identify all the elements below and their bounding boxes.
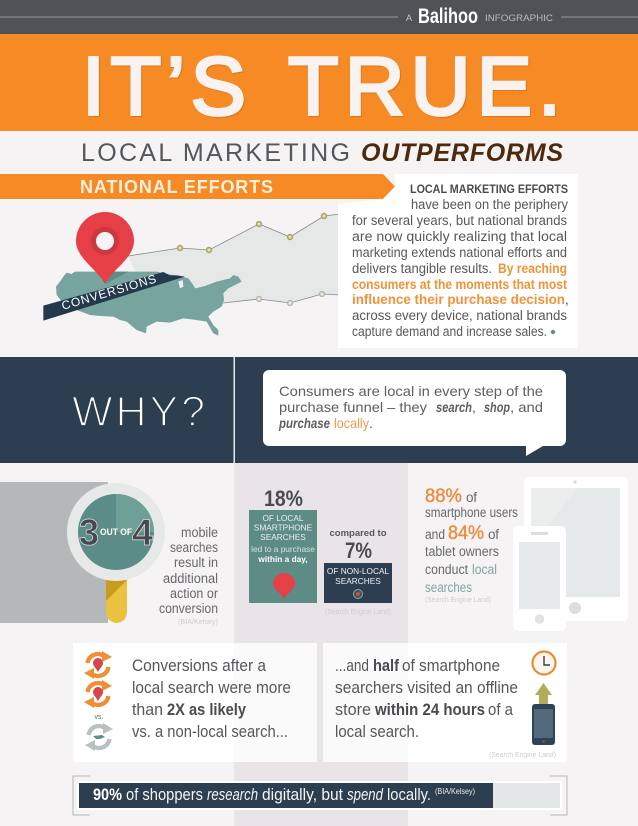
panel: half of smartphone searchers: of smartphone	[402, 657, 500, 675]
subtitle: local marketing outperforms	[81, 139, 563, 167]
stat card: 18% of local smartphone searches: led to a purchase	[251, 544, 315, 554]
magnifier stat: 3 out of 4: OUT OF	[100, 527, 132, 537]
magnifier stat: 3 out of 4: 3	[79, 512, 99, 553]
title banner: IT'S TRUE.: IT’S	[83, 40, 247, 134]
text: 88% of smartphone users and 84% of tablet owners: (Search Engine Land)	[425, 595, 491, 604]
text: 88% of smartphone users and 84% of tablet owners: of	[488, 527, 499, 542]
icon: upward arrow	[535, 683, 552, 704]
icon: tablet	[524, 477, 628, 621]
stat card: 18% of local smartphone searches: SEARCHES	[260, 532, 306, 542]
speech bubble: consumers are local: , and	[510, 399, 543, 415]
speech bubble: consumers are local: search	[436, 399, 472, 415]
magnifier stat: 3 out of 4	[0, 482, 165, 623]
text: mobile searches result: mobile	[181, 525, 218, 540]
bottom progress bar: 90% of shoppers: 90%	[93, 786, 122, 804]
bottom progress bar: 90% of shoppers: spend	[347, 786, 384, 804]
text: mobile searches result	[159, 525, 218, 626]
speech bubble: consumers are local: ,	[472, 399, 476, 415]
stat card: 7% of non-local searches: (Search Engine Land)	[325, 607, 391, 616]
panel: conversions after a local search: local search were more	[132, 679, 291, 697]
speech bubble: consumers are local: purchase funnel – they	[279, 399, 427, 415]
text: 88% of smartphone users and 84% of tablet owners: 84%	[448, 523, 484, 544]
panel: local marketing efforts text: capture demand and increase sales.	[352, 324, 547, 339]
text: mobile searches result: action or	[170, 586, 218, 601]
panel: half of smartphone searchers: ...and	[335, 657, 369, 675]
text: mobile searches result: searches	[170, 540, 218, 555]
panel: local marketing efforts text: consumers at the moments that most	[352, 277, 567, 292]
bottom progress bar: 90% of shoppers: of shoppers	[126, 786, 203, 804]
speech bubble: consumers are local	[263, 370, 566, 456]
why band	[0, 357, 638, 463]
why band: WHY?	[72, 388, 205, 436]
national efforts arrow banner	[0, 174, 395, 199]
stat card: 7% of non-local searches: OF NON-LOCAL	[327, 566, 389, 576]
bottom progress bar: 90% of shoppers: digitally, but	[262, 786, 343, 804]
panel: half of smartphone searchers: local search.	[335, 723, 419, 741]
panel: half of smartphone searchers: within 24 hours	[374, 701, 485, 719]
panel: half of smartphone searchers: searchers visited an offline	[335, 679, 518, 697]
panel: conversions after a local search: than	[132, 701, 163, 719]
speech bubble: consumers are local: .	[369, 415, 373, 431]
stat card: 7% of non-local searches	[324, 528, 392, 616]
panel: local marketing efforts text: marketing extends national efforts and	[352, 245, 567, 260]
icon: phone	[532, 704, 555, 745]
panel: conversions after a local search: vs. a non-local search...	[132, 723, 288, 741]
panel: half of smartphone searchers: of a	[488, 701, 514, 719]
panel: local marketing efforts text: have been on the periphery	[411, 197, 568, 212]
header bar: A Balihoo infographic: A	[406, 13, 412, 23]
speech bubble: consumers are local: shop	[484, 399, 510, 415]
label: vs.: vs.	[95, 714, 104, 721]
panel: conversions after a local search	[73, 643, 317, 762]
speech bubble: consumers are local: Consumers are local in every step of the	[279, 383, 543, 399]
panel: local marketing efforts text: for several years, but national brands	[352, 213, 567, 228]
icon: smartphone	[513, 526, 566, 631]
subtitle: local marketing outperforms: LOCAL MARKETING	[81, 139, 350, 167]
title banner: IT'S TRUE.: TRUE.	[289, 40, 562, 134]
panel: local marketing efforts text: across every device, national brands	[352, 308, 567, 323]
text: 88% of smartphone users and 84% of tablet owners	[425, 486, 518, 604]
icon: grey conversion cycle	[85, 723, 113, 751]
panel: local marketing efforts text: ,	[565, 292, 569, 307]
icon: orange conversion cycle 1	[84, 651, 112, 679]
stat card: 18% of local smartphone searches: within a day,	[257, 554, 308, 564]
icon: clock	[532, 652, 556, 674]
panel: half of smartphone searchers: store	[335, 701, 371, 719]
panel: conversions after a local search: 2X as likely	[167, 701, 247, 719]
map of the USA with pin and conversions ribbon: CONVERSIONS	[60, 272, 158, 313]
header bar: A Balihoo infographic: INFOGRAPHIC	[485, 13, 553, 24]
bottom progress bar: 90% of shoppers	[73, 776, 567, 815]
bottom progress bar: 90% of shoppers: (BIA/Kelsey)	[435, 787, 475, 796]
title banner: IT'S TRUE.: TRUE.	[288, 40, 561, 132]
panel: half of smartphone searchers: half	[373, 657, 399, 675]
title banner: IT'S TRUE.: IT’S	[82, 40, 246, 132]
bottom progress bar: 90% of shoppers: locally.	[387, 786, 431, 804]
panel: half of smartphone searchers	[323, 643, 567, 762]
text: 88% of smartphone users and 84% of tablet owners: smartphone users	[425, 505, 518, 520]
panel: half of smartphone searchers: (Search Engine Land)	[489, 750, 556, 759]
text: 88% of smartphone users and 84% of tablet owners: tablet owners	[425, 544, 499, 559]
speech bubble: consumers are local: locally	[334, 415, 369, 431]
panel: local marketing efforts text: LOCAL MARKETING EFFORTS	[410, 182, 568, 196]
text: mobile searches result: conversion	[159, 601, 218, 616]
speech bubble: consumers are local: purchase	[278, 415, 330, 431]
panel: local marketing efforts text: By reaching	[498, 261, 567, 276]
panel: local marketing efforts text	[338, 174, 578, 348]
magnifier stat: 3 out of 4: 4	[132, 512, 153, 553]
text: mobile searches result: (BIA/Kelsey)	[178, 617, 218, 626]
text: mobile searches result: result in	[174, 555, 218, 570]
stat card: 7% of non-local searches: 7%	[345, 538, 372, 563]
text: 88% of smartphone users and 84% of tablet owners: conduct	[425, 562, 468, 577]
stat card: 18% of local smartphone searches: 18%	[264, 486, 303, 511]
stat card: 18% of local smartphone searches: OF LOCAL	[262, 513, 304, 523]
panel: conversions after a local search: Conversions after a	[132, 657, 267, 675]
stat card: 7% of non-local searches: SEARCHES	[335, 576, 381, 586]
text: 88% of smartphone users and 84% of tablet owners: local	[472, 562, 497, 577]
map of the USA with pin and conversions ribbon	[43, 212, 242, 336]
text: 88% of smartphone users and 84% of tablet owners: 88%	[425, 486, 462, 507]
bottom progress bar: 90% of shoppers: research	[207, 786, 258, 804]
stat card: 18% of local smartphone searches	[249, 486, 317, 603]
panel: local marketing efforts text: delivers tangible results.	[352, 261, 492, 276]
text: 88% of smartphone users and 84% of tablet owners: and	[425, 527, 445, 542]
grey trend area with chart lines	[128, 214, 340, 305]
panel: local marketing efforts text: are now quickly realizing that local	[352, 229, 567, 244]
icon: orange conversion cycle 2	[84, 680, 112, 708]
stat card: 7% of non-local searches: compared to	[329, 528, 387, 539]
header bar: A Balihoo infographic: Balihoo	[418, 5, 478, 28]
stat card: 18% of local smartphone searches: SMARTPHONE	[254, 522, 313, 532]
panel: local marketing efforts text: influence their purchase decision	[352, 292, 565, 307]
national efforts arrow banner: NATIONAL EFFORTS	[80, 177, 273, 197]
text: mobile searches result: additional	[163, 571, 218, 586]
subtitle: local marketing outperforms: OUTPERFORMS	[361, 139, 563, 167]
text: 88% of smartphone users and 84% of tablet owners: searches	[425, 580, 472, 595]
text: 88% of smartphone users and 84% of tablet owners: of	[466, 490, 477, 505]
title banner: IT'S TRUE.	[0, 34, 638, 134]
header bar: A Balihoo infographic	[0, 0, 638, 34]
